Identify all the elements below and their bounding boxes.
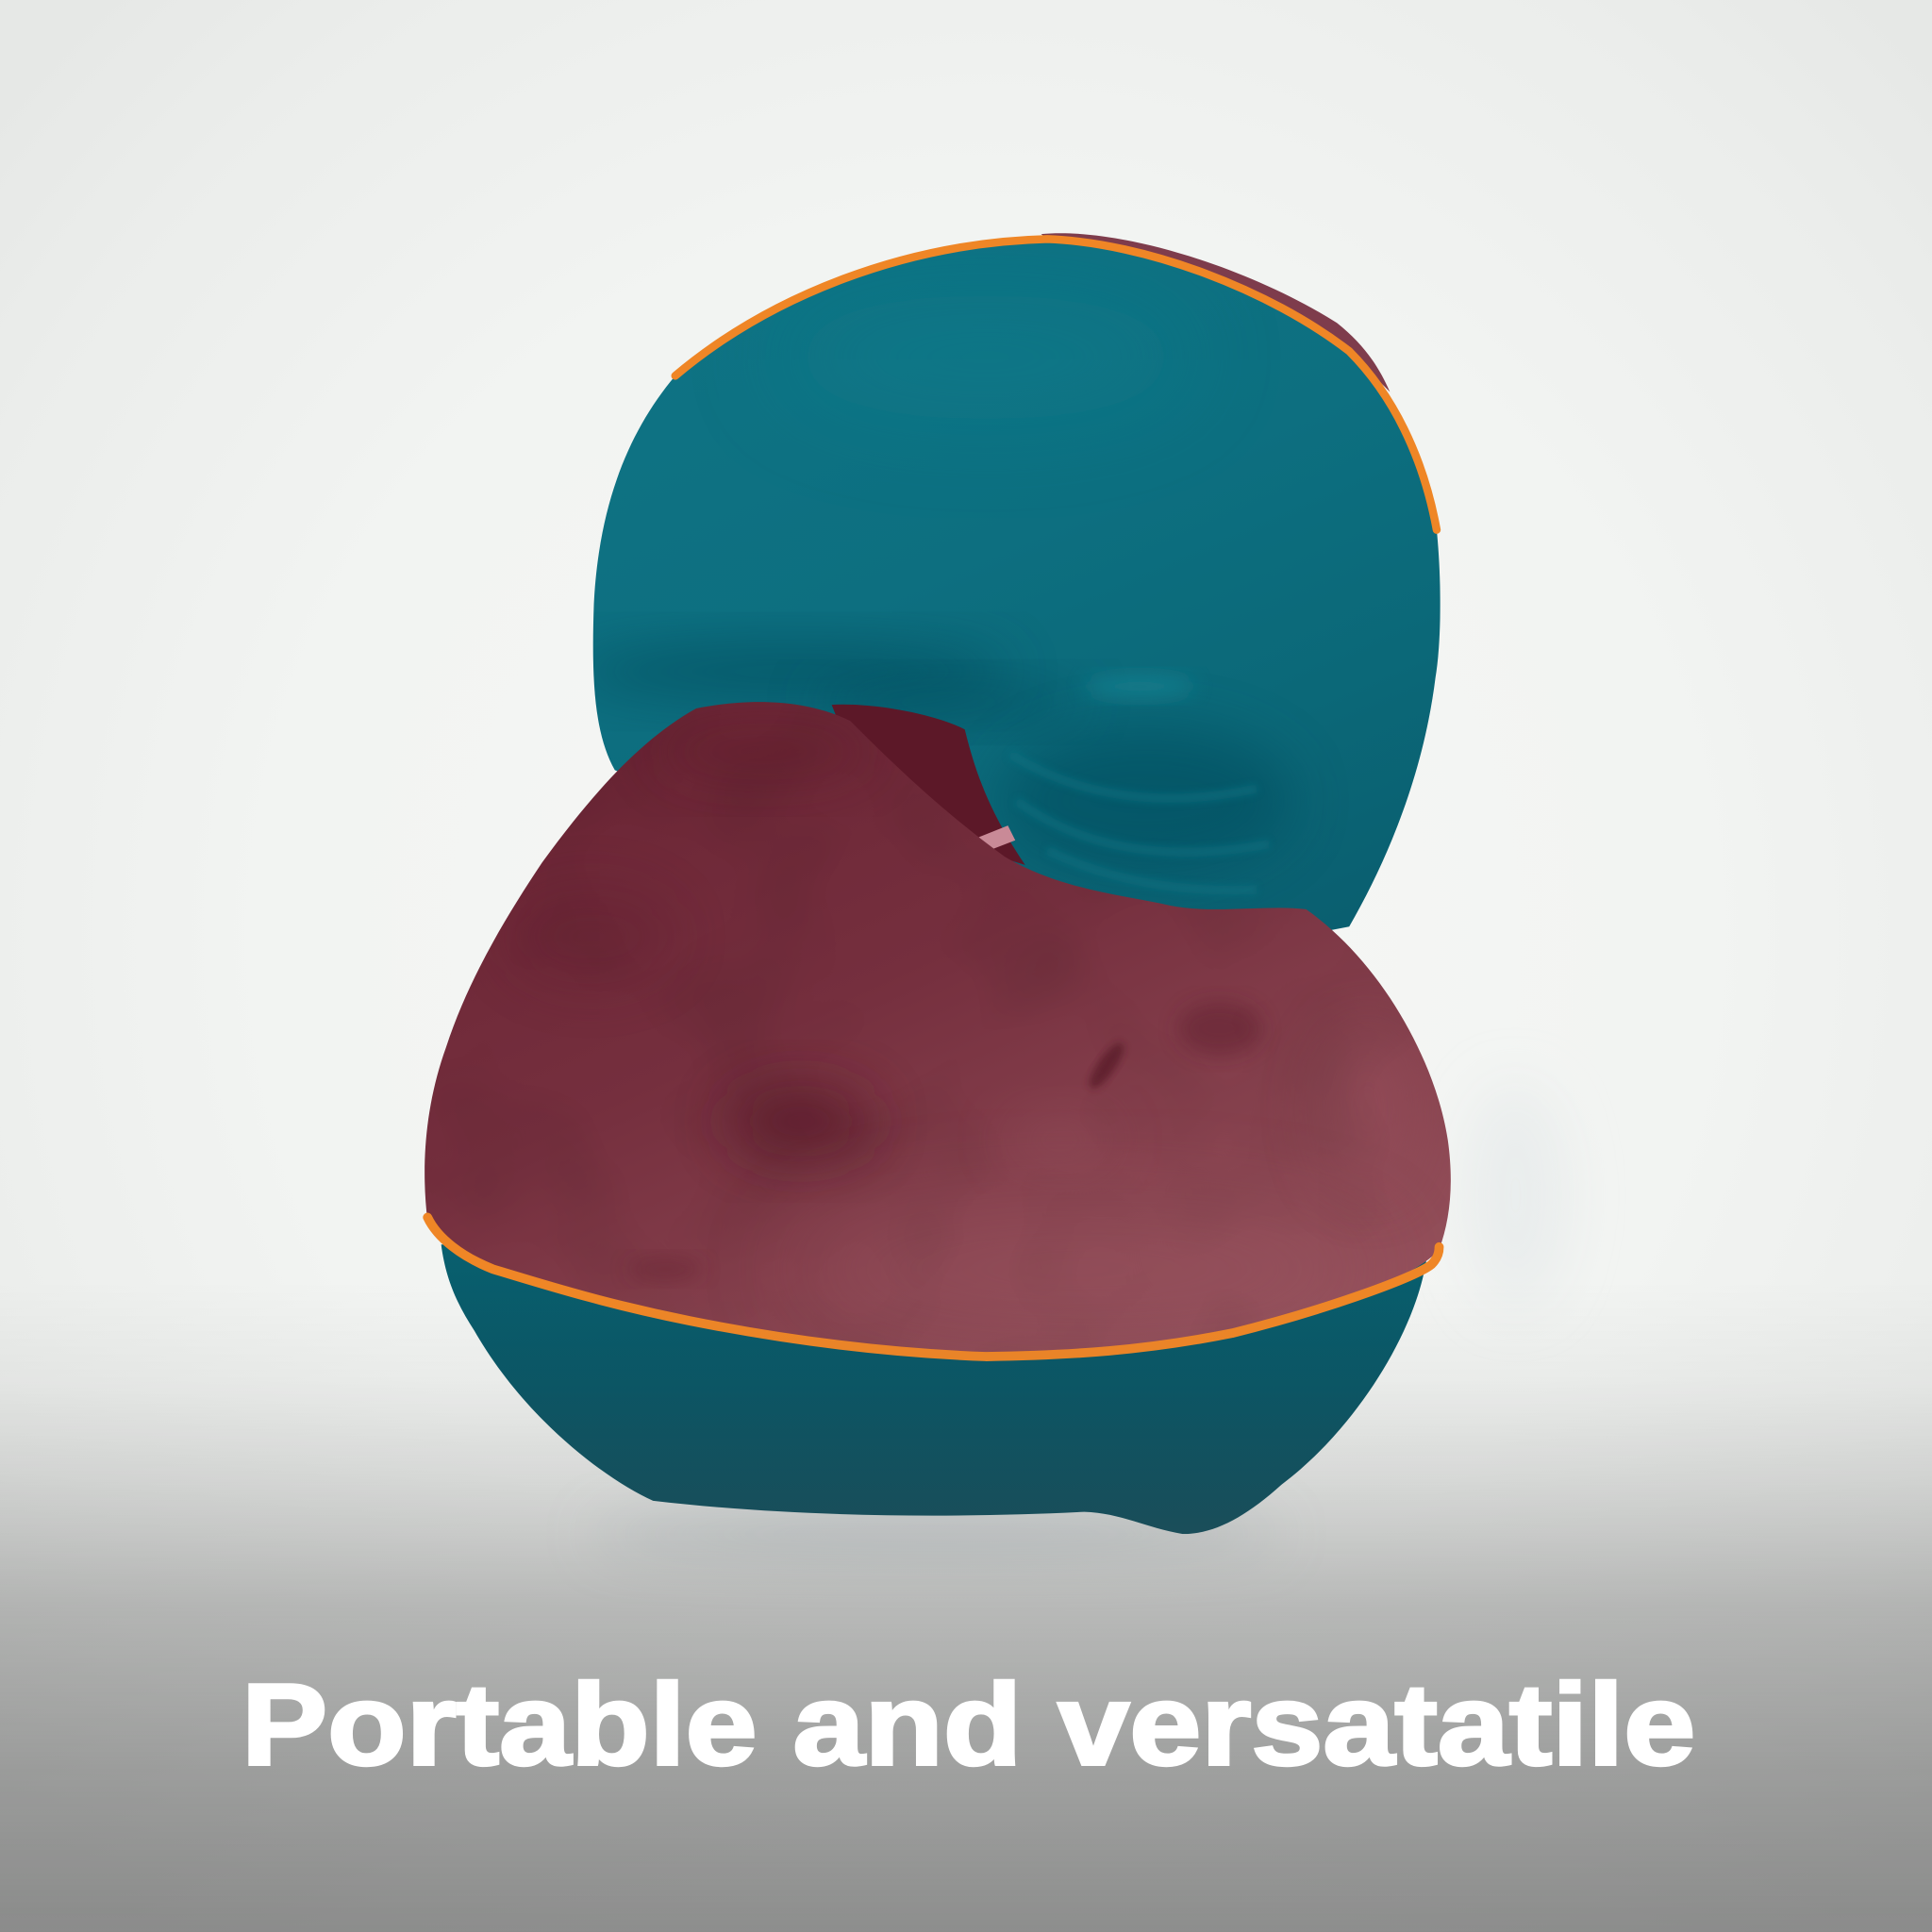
soft floor shadow under pillow [591,1084,1565,1549]
bottom dark gradient overlay [0,1281,1932,1932]
label stitching [971,825,1015,853]
maroon middle section [413,690,1460,1368]
dark satin inner fold [832,705,1025,865]
maroon back strip of top lobe [1041,233,1390,391]
orange piping top [675,239,1437,530]
pillow photo [413,222,1460,1546]
teal upper lobe [592,243,1441,930]
title: Portable and versatatile [242,1660,1695,1790]
orange piping bottom [427,1217,1440,1357]
teal lower section [431,1239,1441,1546]
